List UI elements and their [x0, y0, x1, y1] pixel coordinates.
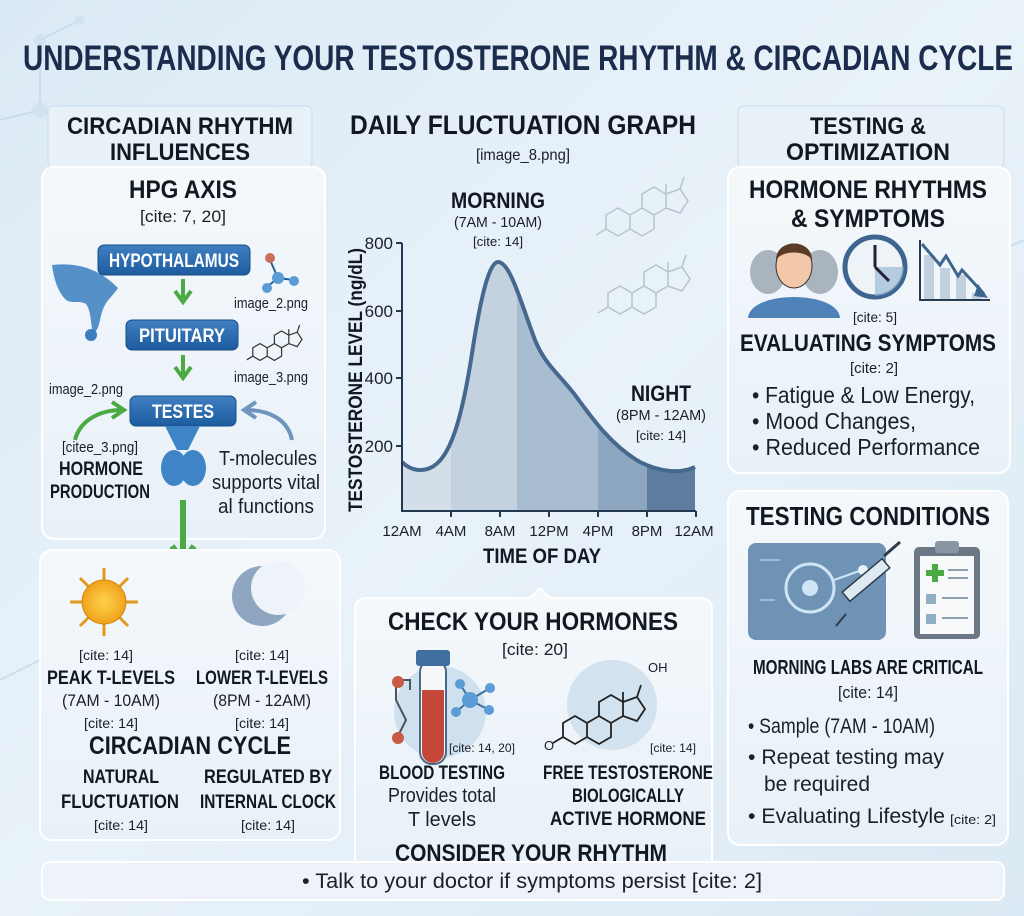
panel: check your hormones: FREE TESTOSTERONE [543, 763, 713, 784]
footer bar: consider your rhythm: • Talk to your doctor if symptoms persist [cite: 2] [302, 870, 762, 893]
icon: blood tube [392, 650, 515, 764]
chart: testosterone daily curve: 4AM [436, 523, 466, 540]
panel: circadian cycle: PEAK T-LEVELS [47, 668, 175, 689]
panel: testing conditions: TESTING CONDITIONS [746, 501, 990, 531]
chart: testosterone daily curve: 4PM [583, 523, 613, 540]
box: hypothalamus [98, 245, 250, 275]
icon: declining chart [920, 240, 990, 300]
panel: HPG axis: [citee_3.png] [62, 439, 138, 456]
panel: testing conditions: [cite: 2] [950, 812, 996, 827]
panel: circadian cycle: (8PM - 12AM) [213, 691, 311, 710]
panel: testing conditions: • Sample (7AM - 10AM) [748, 715, 935, 738]
panel: check your hormones [355, 588, 713, 862]
icon: testosterone molecule: O [544, 738, 554, 753]
panel: circadian cycle: [cite: 14] [79, 647, 133, 663]
header: testing & optimization: OPTIMIZATION [786, 139, 950, 166]
panel: check your hormones: BLOOD TESTING [379, 763, 505, 784]
panel: circadian cycle: [cite: 14] [235, 715, 289, 731]
panel: HPG axis: PRODUCTION [50, 482, 150, 503]
panel: hormone rhythms & symptoms: • Fatigue & Low Energy, [752, 382, 975, 408]
box: hypothalamus: HYPOTHALAMUS [109, 251, 239, 272]
box: pituitary: PITUITARY [139, 326, 225, 347]
label: morning: MORNING [451, 188, 545, 213]
panel: testing conditions: be required [764, 773, 870, 796]
panel: hormone rhythms & symptoms: • Mood Changes, [752, 408, 916, 434]
icon: testes shape [161, 426, 206, 486]
icon: clock [845, 237, 905, 297]
chart: testosterone daily curve: (8PM - 12AM) [616, 407, 706, 424]
panel: circadian cycle: [cite: 14] [241, 817, 295, 833]
icon: steroid small [247, 325, 302, 360]
chart: testosterone daily curve: [cite: 14] [473, 234, 523, 249]
icon: clipboard [914, 541, 980, 639]
panel: HPG axis: supports vital [212, 472, 320, 494]
icon: brain drip [52, 264, 118, 341]
icon: people [748, 244, 840, 318]
panel: circadian cycle: INTERNAL CLOCK [200, 792, 336, 813]
panel: hormone rhythms & symptoms: [cite: 2] [850, 360, 898, 377]
panel: hormone rhythms & symptoms [728, 167, 1010, 473]
chart: testosterone daily curve: (7AM - 10AM) [454, 214, 542, 231]
panel: check your hormones: BIOLOGICALLY [572, 786, 684, 807]
icon: testosterone molecule: OH [648, 660, 668, 675]
panel: testing conditions [728, 491, 1008, 845]
footer bar: consider your rhythm: CONSIDER YOUR RHYTHM [395, 840, 667, 867]
footer bar: consider your rhythm [42, 840, 1004, 900]
icon: blood tube: [cite: 14, 20] [449, 741, 515, 755]
heading: daily fluctuation graph [350, 110, 696, 164]
chart: testosterone daily curve: 12PM [529, 523, 569, 540]
panel: testing conditions: • Evaluating Lifestyle [748, 805, 945, 828]
panel: circadian cycle [40, 550, 340, 840]
chart: testosterone daily curve: TIME OF DAY [483, 545, 601, 568]
arrow: down to cycle panel [172, 500, 194, 562]
box: testes [130, 396, 236, 426]
panel: circadian cycle: REGULATED BY [204, 767, 332, 788]
label: night: NIGHT [631, 381, 691, 406]
header: testing & optimization: TESTING & [810, 113, 926, 140]
panel: HPG axis: [cite: 7, 20] [140, 207, 226, 226]
panel: circadian cycle: CIRCADIAN CYCLE [89, 732, 291, 760]
panel: HPG axis: image_2.png [234, 295, 308, 312]
panel: circadian cycle: FLUCTUATION [61, 792, 179, 813]
icon: testosterone molecule [544, 660, 696, 755]
icon: sun [70, 568, 138, 636]
panel: check your hormones: ACTIVE HORMONE [550, 809, 706, 830]
icon: steroid molecules faded [596, 177, 690, 314]
panel: testing conditions: [cite: 14] [838, 683, 898, 702]
icon: syringe [836, 542, 900, 626]
chart: testosterone daily curve: 200 [365, 437, 393, 456]
panel: testing conditions: • Repeat testing may [748, 746, 944, 769]
panel: hormone rhythms & symptoms: • Reduced Performance [752, 434, 980, 460]
panel: HPG axis: HORMONE [59, 459, 143, 480]
chart: testosterone daily curve: 8PM [632, 523, 662, 540]
panel: hormone rhythms & symptoms: [cite: 5] [853, 309, 897, 325]
chart: testosterone daily curve: [cite: 14] [636, 428, 686, 443]
panel: circadian cycle: NATURAL [83, 767, 159, 788]
chart: testosterone daily curve: 8AM [485, 523, 515, 540]
panel: circadian cycle: [cite: 14] [94, 817, 148, 833]
panel: HPG axis [42, 167, 325, 539]
box: pituitary [126, 320, 238, 350]
panel: check your hormones: [cite: 20] [502, 640, 568, 659]
chart: testosterone daily curve: 600 [365, 302, 393, 321]
panel: circadian cycle: LOWER T-LEVELS [196, 668, 328, 689]
header: circadian rhythm influences [48, 106, 312, 168]
panel: hormone rhythms & symptoms: & SYMPTOMS [791, 205, 945, 233]
panel: check your hormones: T levels [408, 809, 476, 831]
icon: moon [232, 561, 305, 626]
chart: testosterone daily curve: TESTOSTERONE LEVEL (ng/dL) [346, 248, 367, 512]
panel: circadian cycle: [cite: 14] [235, 647, 289, 663]
panel: circadian cycle: [cite: 14] [84, 715, 138, 731]
panel: check your hormones: Provides total [388, 785, 496, 807]
header: circadian rhythm influences: INFLUENCES [110, 139, 250, 166]
icon: molecule small [262, 253, 299, 293]
icon: tablet [748, 543, 886, 640]
panel: HPG axis: image_2.png [49, 381, 123, 398]
chart: testosterone daily curve: 12AM [674, 523, 714, 540]
chart: testosterone daily curve: 12AM [382, 523, 422, 540]
panel: HPG axis: image_3.png [234, 369, 308, 386]
heading: daily fluctuation graph: [image_8.png] [476, 147, 570, 164]
box: testes: TESTES [152, 402, 214, 423]
header: circadian rhythm influences: CIRCADIAN RHYTHM [67, 113, 293, 140]
panel: check your hormones: CHECK YOUR HORMONES [388, 608, 678, 636]
chart: testosterone daily curve: 400 [365, 369, 393, 388]
panel: circadian cycle: (7AM - 10AM) [62, 691, 160, 710]
panel: HPG axis: HPG AXIS [129, 176, 237, 204]
heading: daily fluctuation graph: DAILY FLUCTUATION GRAPH [350, 110, 696, 140]
chart: testosterone daily curve [346, 188, 714, 568]
panel: hormone rhythms & symptoms: HORMONE RHYTHMS [749, 176, 987, 204]
chart: testosterone daily curve: 800 [365, 234, 393, 253]
icon: testosterone molecule: [cite: 14] [650, 741, 696, 755]
header: testing & optimization [738, 106, 1004, 168]
panel: HPG axis: T-molecules [219, 448, 317, 470]
panel: HPG axis: al functions [218, 496, 314, 518]
